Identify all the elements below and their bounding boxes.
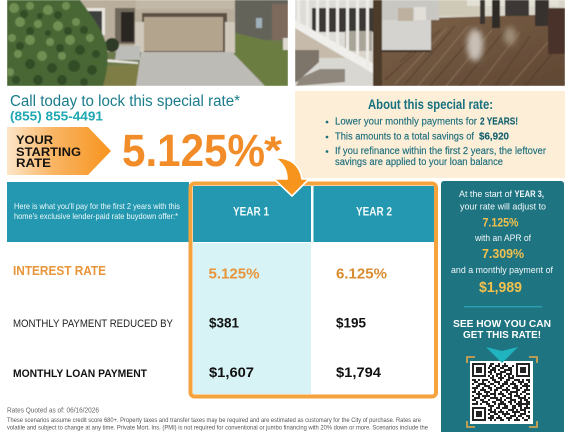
year 3 rate details: with an APR of	[474, 233, 531, 244]
row: monthly payment reduced by: $195	[336, 315, 366, 331]
highlight frame	[190, 184, 436, 396]
table header: intro text	[7, 182, 189, 242]
call to action: SEE HOW YOU CAN	[453, 318, 551, 330]
row: monthly payment reduced by	[13, 315, 366, 331]
row: monthly loan payment: $1,794	[336, 364, 381, 380]
disclaimer: volatile and subject to change at any time. Private Mort. Ins. (PMI) is not required for conventional or jumbo financing with 20% down or more. Scenarios include the	[7, 426, 429, 432]
year 2 header: YEAR 2	[356, 207, 392, 219]
qr code	[467, 357, 537, 427]
row: interest rate: 5.125%	[208, 266, 260, 283]
badge: your starting rate: STARTING	[16, 145, 81, 159]
arrow: curved pointer to year 1	[274, 158, 309, 196]
badge: your starting rate	[7, 127, 111, 175]
year 3 rate details: your rate will adjust to	[460, 202, 546, 213]
bullet list	[326, 116, 547, 168]
table header: intro text: home's exclusive lender-paid rate buydown offer:*	[14, 211, 179, 221]
row: interest rate: INTEREST RATE	[13, 263, 106, 278]
bullet list: This amounts to a total savings of	[335, 132, 474, 142]
year 3 rate details: 7.125%	[482, 216, 519, 230]
bullet list: Lower your monthly payments for	[335, 116, 478, 128]
bullet list: If you refinance within the first 2 years, the leftover	[335, 146, 547, 157]
big starting rate: 5.125%	[122, 125, 265, 176]
disclaimer	[7, 406, 429, 432]
call to action	[453, 318, 551, 341]
photo: house exterior	[6, 0, 288, 86]
call to action: GET THIS RATE!	[463, 329, 541, 341]
badge: your starting rate: YOUR	[16, 133, 53, 147]
year 1 header	[193, 186, 311, 242]
row: monthly loan payment: MONTHLY LOAN PAYMENT	[13, 368, 147, 380]
panel: about this special rate	[295, 91, 565, 178]
row: monthly loan payment	[13, 364, 381, 380]
year 1 column background	[193, 243, 311, 394]
row: interest rate: 6.125%	[336, 266, 387, 283]
icon: pointer triangle	[486, 347, 518, 363]
heading: call today: Call today to lock this special rate*	[10, 93, 240, 110]
year 3 rate details: At the start of	[459, 189, 512, 200]
badge: your starting rate: RATE	[16, 156, 51, 170]
panel heading: About this special rate:	[368, 96, 493, 112]
row: monthly payment reduced by: MONTHLY PAYMENT REDUCED BY	[13, 318, 174, 330]
row: interest rate	[13, 263, 387, 283]
year 3 rate details	[451, 189, 553, 296]
photo: home interior	[295, 0, 565, 86]
year 3 rate details: 7.309%	[482, 246, 524, 261]
bullet list: savings are applied to your loan balance	[335, 157, 503, 168]
big starting rate: *	[264, 129, 282, 173]
row: monthly payment reduced by: $381	[209, 315, 239, 331]
disclaimer: These scenarios assume credit score 680+. Property taxes and transfer taxes may be required and are estimated as customary for the City of purchase. Rates are	[7, 418, 422, 424]
year 2 header	[314, 186, 434, 242]
row: monthly loan payment: $1,607	[209, 364, 254, 380]
phone number: (855) 855-4491	[10, 108, 103, 124]
year 3 rate details: and a monthly payment of	[451, 265, 553, 276]
year 1 header: YEAR 1	[233, 207, 270, 219]
year 3 rate details: $1,989	[479, 280, 522, 296]
bullet list: $6,920	[479, 132, 509, 142]
bullet list: 2 YEARS!	[480, 116, 518, 128]
disclaimer: Rates Quoted as of: 06/16/2026	[7, 406, 99, 415]
panel: year 3 adjustment	[441, 181, 564, 432]
table header: intro text: Here is what you'll pay for the first 2 years with this	[14, 201, 180, 211]
year 3 rate details: YEAR 3,	[514, 189, 544, 200]
